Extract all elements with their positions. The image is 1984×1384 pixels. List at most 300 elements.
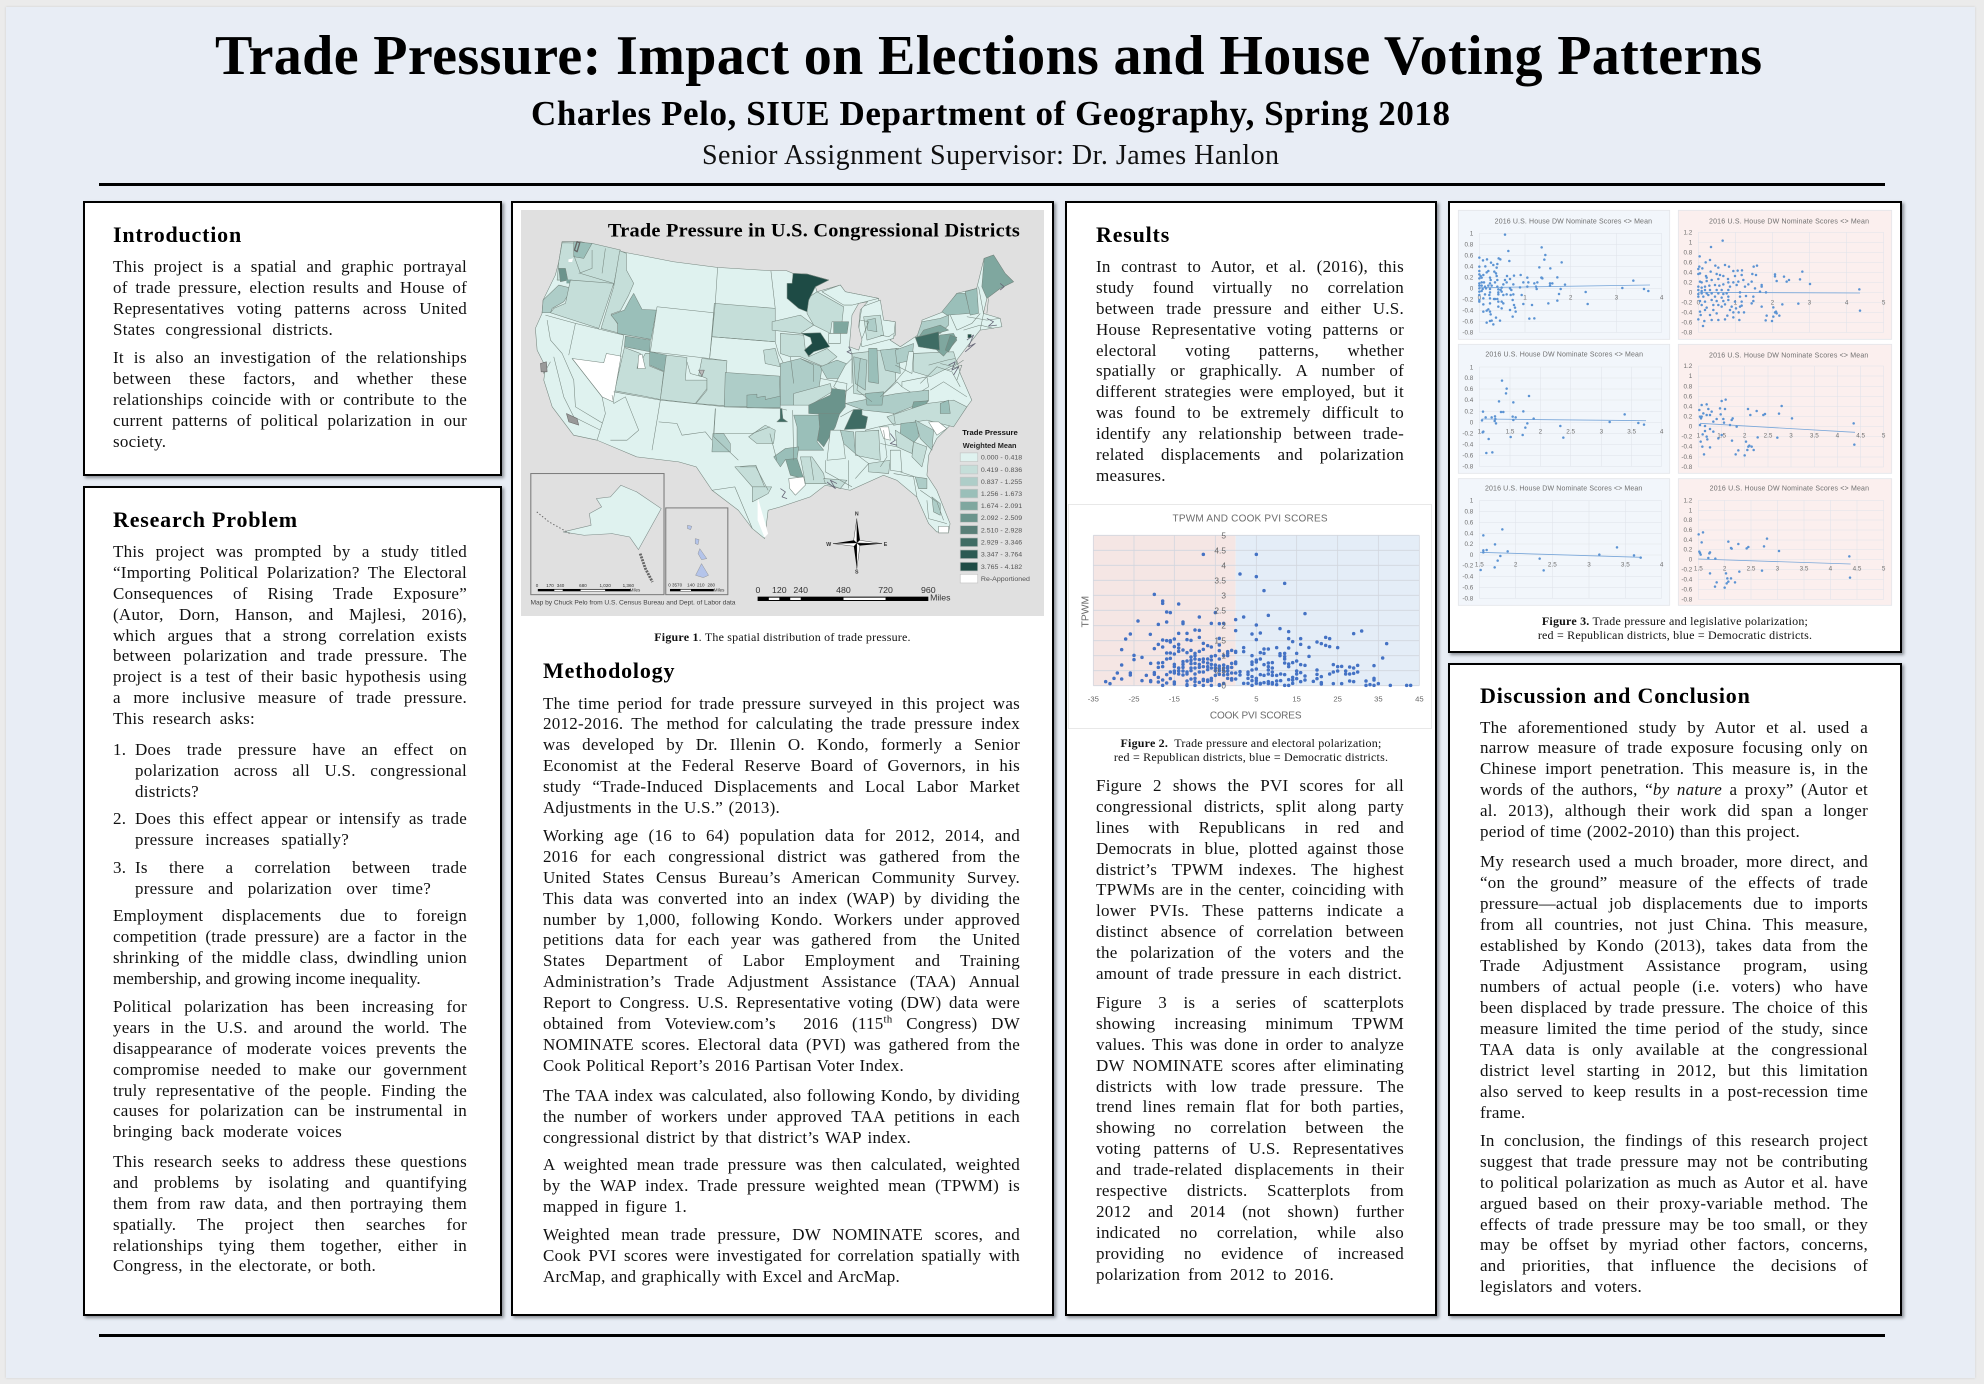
scale bar: 960 bbox=[921, 585, 935, 595]
text: methodology paragraph 1: Adjustments in the U.S.” (2013). bbox=[543, 798, 780, 817]
map legend: 0.419 - 0.836 bbox=[980, 467, 1022, 474]
text: results paragraph 3: showing increasing minimum TPWM bbox=[1096, 1014, 1404, 1033]
figure 3: six scatterplot grid: 4 bbox=[1845, 299, 1849, 306]
text: methodology paragraph 2 bbox=[543, 826, 1020, 1075]
figure 3: six scatterplot grid: 4.5 bbox=[1856, 433, 1866, 440]
text: results paragraph 2: the polarization of the voters and the bbox=[1096, 943, 1404, 962]
chart titles: 2016 U.S. House DW Nominate Scores <> Mean bbox=[1709, 219, 1869, 226]
figure 2: scatterplot of TPWM vs Cook PVI: 25 bbox=[1333, 694, 1342, 703]
tick labels: -0.4 bbox=[1462, 307, 1474, 314]
text: results paragraph 3: 2012 and 2014 (not shown) further bbox=[1096, 1202, 1404, 1221]
text: methodology paragraph 4: A weighted mean trade pressure was then calculated, weighted bbox=[543, 1155, 1020, 1174]
text: discussion paragraph 2: been displaced by trade pressure. The choice of this bbox=[1480, 998, 1868, 1017]
figure 3: six scatterplot grid: 5 bbox=[1882, 433, 1886, 440]
text: introduction paragraph 2: society. bbox=[113, 432, 166, 451]
text: research approach bbox=[113, 1152, 467, 1275]
figure 3: six scatterplot grid: 2 bbox=[1723, 566, 1727, 573]
tick labels: -0.6 bbox=[1681, 319, 1693, 326]
map legend: 3.347 - 3.764 bbox=[980, 552, 1022, 559]
text: research question 1: Does trade pressure have an effect on bbox=[135, 740, 467, 759]
text: methodology paragraph 1: Economist at the Federal Reserve Board of Governors, in his bbox=[543, 756, 1020, 775]
axis labels: 1 bbox=[1221, 651, 1226, 661]
figure 2: scatterplot of TPWM vs Cook PVI: COOK PVI SCORES bbox=[1210, 711, 1302, 722]
figure 3: six scatterplot grid: 3.5 bbox=[1627, 429, 1637, 436]
text: methodology paragraph 3: congressional district by that district’s WAP index. bbox=[543, 1128, 911, 1147]
map credit: Map by Chuck Pelo from U.S. Census Bureau and Dept. of Labor data bbox=[530, 599, 735, 606]
tick labels: 0 bbox=[1470, 552, 1474, 559]
text: political polarization: compromise needed to make our government bbox=[113, 1060, 467, 1079]
scale bar: 720 bbox=[878, 585, 893, 595]
inset: Hawaii: 0 3570 bbox=[668, 582, 682, 587]
text: results paragraph 2: Figure 2 shows the PVI scores for all bbox=[1096, 776, 1404, 795]
figure 3: six scatterplot grid: 3 bbox=[1615, 295, 1619, 302]
text: employment displacements: Employment displacements due to foreign bbox=[113, 906, 467, 925]
figure 3: six scatterplot grid: 2.5 bbox=[1764, 433, 1773, 440]
tick labels: 1 bbox=[1689, 507, 1693, 514]
tick labels: 0.6 bbox=[1465, 386, 1474, 393]
text: results paragraph 2 bbox=[1096, 776, 1404, 983]
panel: map and methodology bbox=[511, 201, 1054, 1316]
figure 3: six scatterplot grid: 1.5 bbox=[1506, 429, 1515, 436]
text: discussion paragraph 1: words of the authors, “by nature a proxy” (Autor et bbox=[1480, 780, 1868, 799]
figure 3: six scatterplot grid: 4 bbox=[1660, 295, 1664, 302]
text: methodology paragraph 2: Working age (16 to 64) population data for 2012, 2014, and bbox=[543, 826, 1020, 845]
text: conclusion paragraph: may be offset by myriad other factors, concerns, bbox=[1480, 1235, 1868, 1254]
inset: Hawaii: Miles bbox=[713, 588, 725, 593]
tick labels: 0.2 bbox=[1465, 541, 1474, 548]
tick labels: -0.6 bbox=[1462, 585, 1474, 592]
figure 2: scatterplot of TPWM vs Cook PVI: TPWM bbox=[1080, 596, 1091, 627]
text: results paragraph 1: House Representative voting patterns or bbox=[1096, 320, 1404, 339]
figure 3: six scatterplot grid: 5 bbox=[1882, 299, 1886, 306]
text: research problem paragraph 1: (Autor, Dorn, Hanson, and Majlesi, 2016), bbox=[113, 605, 467, 624]
text: research question 3: pressure and polarization over time? bbox=[135, 879, 431, 898]
axis labels: 2 bbox=[1221, 621, 1226, 631]
tick labels: 0.4 bbox=[1684, 269, 1693, 276]
text: research problem paragraph 1: This project was prompted by a study titled bbox=[113, 542, 467, 561]
text: introduction paragraph 2: between these factors, and whether these bbox=[113, 369, 467, 388]
figure 3: six scatterplot grid: 2 bbox=[1569, 295, 1573, 302]
heading: discussion and conclusion: Discussion and Conclusion bbox=[1480, 683, 1751, 708]
map legend: 0.837 - 1.255 bbox=[980, 479, 1022, 486]
text: results paragraph 1: different strategies were employed, but it bbox=[1096, 382, 1404, 401]
inset: Alaska: 1,020 bbox=[599, 583, 611, 588]
text: discussion paragraph 2: established by Kondo (2013), takes data from the bbox=[1480, 936, 1868, 955]
text: methodology paragraph 3: the number of workers under approved TAA petitions in each bbox=[543, 1107, 1020, 1126]
map legend bbox=[960, 428, 1030, 583]
text: research question 3 bbox=[113, 858, 467, 898]
figure 3: six scatterplot grid bbox=[1458, 210, 1892, 606]
figure 3: six scatterplot grid: 3 bbox=[1789, 433, 1793, 440]
tick labels: 0.6 bbox=[1684, 393, 1693, 400]
text: discussion paragraph 2: TAA data is only available at the congressional bbox=[1480, 1040, 1868, 1059]
map legend: Weighted Mean bbox=[962, 442, 1016, 450]
text: methodology paragraph 4 bbox=[543, 1155, 1020, 1216]
text: methodology paragraph 2: 2016 for each congressional district was gathered from the bbox=[543, 847, 1020, 866]
inset: Alaska: 170 bbox=[546, 583, 554, 588]
text: research problem paragraph 1: a more inclusive measure of trade pressure. bbox=[113, 688, 467, 707]
text: conclusion paragraph: and priorities, that influence the decisions of bbox=[1480, 1256, 1868, 1275]
figure 3: six scatterplot grid: 1 bbox=[1478, 429, 1482, 436]
figure 3: six scatterplot grid: 1.5 bbox=[1694, 566, 1703, 573]
figure 3: six scatterplot grid: 0 bbox=[1478, 295, 1482, 302]
figure 3: six scatterplot grid: 2.5 bbox=[1747, 566, 1756, 573]
text: research approach: relationships tying them together, either in bbox=[113, 1236, 467, 1255]
heading: research problem: Research Problem bbox=[113, 507, 298, 532]
text: results paragraph 3: Figure 3 is a series of scatterplots bbox=[1096, 993, 1404, 1012]
figure 2: scatterplot of TPWM vs Cook PVI: 35 bbox=[1374, 694, 1383, 703]
tick labels: 0.8 bbox=[1465, 509, 1474, 516]
tick labels: -0.2 bbox=[1681, 567, 1693, 574]
data points bbox=[1479, 235, 1648, 324]
caption: figure 2 bbox=[1114, 736, 1388, 764]
figure 2: scatterplot of TPWM vs Cook PVI: -25 bbox=[1128, 694, 1140, 703]
inset: Hawaii: 280 bbox=[707, 582, 715, 587]
figure 2: scatterplot of TPWM vs Cook PVI bbox=[1068, 504, 1432, 729]
text: employment displacements: membership, and growing income inequality. bbox=[113, 969, 421, 988]
scale bar bbox=[755, 585, 950, 602]
text: introduction paragraph 1: This project is a spatial and graphic portrayal bbox=[113, 257, 467, 276]
text: methodology paragraph 2: Report to Congress. U.S. Representative voting (DW) data were bbox=[543, 993, 1020, 1012]
tick labels: 0.6 bbox=[1465, 519, 1474, 526]
text: methodology paragraph 4: by the WAP index. Trade pressure weighted mean (TPWM) is bbox=[543, 1176, 1020, 1195]
text: results paragraph 3: voting patterns of U.S. Representatives bbox=[1096, 1139, 1404, 1158]
text: employment displacements: shrinking of the middle class, dwindling union bbox=[113, 948, 467, 967]
figure 3: six scatterplot grid: 3 bbox=[1587, 561, 1591, 568]
southern districts bbox=[773, 430, 948, 533]
tick labels: 0.2 bbox=[1684, 279, 1693, 286]
text: introduction paragraph 2: relationships coincide with or contribute to the bbox=[113, 390, 467, 409]
tick labels: -0.8 bbox=[1462, 463, 1474, 470]
figure 3: six scatterplot grid: 3.5 bbox=[1800, 566, 1809, 573]
panel: introduction bbox=[83, 201, 502, 476]
tick labels: -0.2 bbox=[1462, 296, 1474, 303]
figure 3: six scatterplot grid: 2 bbox=[1539, 429, 1543, 436]
figure 3: six scatterplot grid: 1 bbox=[1734, 299, 1738, 306]
tick labels: 0.4 bbox=[1465, 530, 1474, 537]
axis labels: 3 bbox=[1221, 591, 1226, 601]
text: methodology paragraph 1: The time period for trade pressure surveyed in this project was bbox=[543, 694, 1020, 712]
map legend: 1.674 - 2.091 bbox=[980, 503, 1022, 510]
text: introduction paragraph 1: Representatives voting patterns across United bbox=[113, 299, 467, 318]
scale bar: 480 bbox=[836, 585, 851, 595]
map title: Trade Pressure in U.S. Congressional Districts bbox=[607, 220, 1020, 242]
figure 1: trade pressure map bbox=[521, 210, 1044, 616]
figure 3: six scatterplot grid: 3 bbox=[1600, 429, 1604, 436]
caption: figure 2: Figure 2. Trade pressure and electoral polarization; bbox=[1120, 736, 1381, 750]
tick labels: 0 bbox=[1689, 424, 1693, 431]
figure 2: scatterplot of TPWM vs Cook PVI: -15 bbox=[1169, 694, 1180, 703]
text: results paragraph 3: districts with low trade pressure. The bbox=[1096, 1077, 1404, 1096]
tick labels: -0.2 bbox=[1681, 434, 1693, 441]
map legend: Re-Apportioned bbox=[980, 576, 1030, 583]
map legend: 1.256 - 1.673 bbox=[980, 491, 1022, 498]
western districts bbox=[540, 242, 788, 452]
text: results paragraph 3 bbox=[1096, 993, 1404, 1284]
text: discussion paragraph 2: My research used a much broader, more direct, and bbox=[1480, 852, 1868, 871]
text: introduction paragraph 1 bbox=[113, 257, 467, 339]
text: results paragraph 3: trend lines remain flat for both parties, bbox=[1096, 1097, 1404, 1116]
chart titles: 2016 U.S. House DW Nominate Scores <> Mean bbox=[1495, 219, 1652, 226]
title: Trade Pressure: Impact on Elections and House Voting Patterns bbox=[215, 25, 1762, 87]
inset: Hawaii bbox=[665, 508, 727, 595]
text: political polarization bbox=[113, 997, 467, 1141]
map legend: 2.929 - 3.346 bbox=[980, 540, 1022, 547]
panel: results bbox=[1065, 201, 1437, 1316]
figure 3: six scatterplot grid: 3.5 bbox=[1621, 561, 1630, 568]
text: methodology paragraph 3: The TAA index was calculated, also following Kondo, by dividing bbox=[543, 1086, 1020, 1105]
tick labels: 0 bbox=[1689, 289, 1693, 296]
tick labels: 0.2 bbox=[1465, 274, 1474, 281]
map legend: Trade Pressure bbox=[962, 428, 1017, 437]
axis labels: 4 bbox=[1221, 561, 1226, 571]
text: results paragraph 3: polarization from 2012 to 2016. bbox=[1096, 1265, 1334, 1284]
tick labels: -0.4 bbox=[1681, 309, 1693, 316]
panel: discussion and conclusion bbox=[1448, 663, 1902, 1316]
chart titles: 2016 U.S. House DW Nominate Scores <> Mean bbox=[1485, 486, 1642, 493]
text: results paragraph 3: and trade-related displacements in their bbox=[1096, 1160, 1404, 1179]
tick labels: -0.8 bbox=[1681, 464, 1693, 471]
text: methodology paragraph 2: number by 1,000, following Kondo. Workers under approved bbox=[543, 910, 1020, 929]
tick labels: -0.4 bbox=[1462, 441, 1474, 448]
eastern districts bbox=[772, 255, 1013, 450]
tick labels: 0 bbox=[1470, 285, 1474, 292]
text: methodology paragraph 2: NOMINATE scores. Electoral data (PVI) was gathered from the bbox=[543, 1035, 1020, 1054]
text: methodology paragraph 5: Weighted mean trade pressure, DW NOMINATE scores, and bbox=[543, 1225, 1020, 1244]
scale bar: 240 bbox=[793, 585, 808, 595]
text: discussion paragraph 2: from all countries, not just China. This measure, bbox=[1480, 915, 1868, 934]
scale bar: 120 bbox=[772, 585, 786, 595]
text: methodology paragraph 5: Cook PVI scores were investigated for correlation spatially with bbox=[543, 1246, 1020, 1265]
tick labels: 0.8 bbox=[1465, 375, 1474, 382]
text: results paragraph 1: In contrast to Autor, et al. (2016), this bbox=[1096, 257, 1404, 276]
text: introduction paragraph 2: current patterns of political polarization in our bbox=[113, 411, 467, 430]
text: results paragraph 2: lines with Republicans in red and bbox=[1096, 818, 1404, 837]
text: conclusion paragraph: In conclusion, the findings of this research project bbox=[1480, 1131, 1868, 1150]
text: research question 2: Does this effect appear or intensify as trade bbox=[135, 809, 467, 828]
map legend: 3.765 - 4.182 bbox=[980, 564, 1022, 571]
tick labels: 0.4 bbox=[1684, 403, 1693, 410]
text: results paragraph 2: Democrats in blue, plotted against those bbox=[1096, 839, 1404, 858]
text: introduction paragraph 1: States congressional districts. bbox=[113, 320, 333, 339]
text: discussion paragraph 1 bbox=[1480, 718, 1868, 841]
text: results paragraph 3: indicated no correlation, while also bbox=[1096, 1223, 1404, 1242]
text: methodology paragraph 2: United States Census Bureau’s American Community Survey. bbox=[543, 868, 1020, 887]
text: results paragraph 2: lower PVIs. These patterns indicate a bbox=[1096, 901, 1404, 920]
text: results paragraph 1 bbox=[1096, 257, 1404, 485]
text: results paragraph 1: was found to be extremely difficult to bbox=[1096, 403, 1404, 422]
caption: figure 3: Figure 3. Trade pressure and legislative polarization; bbox=[1542, 614, 1808, 628]
text: political polarization: years in the U.S. and around the world. The bbox=[113, 1018, 467, 1037]
tick labels: -0.2 bbox=[1462, 563, 1474, 570]
text: methodology paragraph 2: Cook Political Report’s 2016 Partisan Voter Index. bbox=[543, 1056, 904, 1075]
text: conclusion paragraph: suggest that trade pressure may not be contributing bbox=[1480, 1152, 1868, 1171]
tick labels: -0.6 bbox=[1681, 454, 1693, 461]
tick labels: 0.4 bbox=[1684, 537, 1693, 544]
icon: compass rose bbox=[826, 512, 887, 576]
inset: Hawaii: 140 bbox=[687, 582, 695, 587]
panel: figure 3 scatterplots bbox=[1448, 201, 1902, 653]
tick labels: -0.8 bbox=[1681, 329, 1693, 336]
tick labels: 0.2 bbox=[1684, 547, 1693, 554]
text: results paragraph 2: district’s TPWM indexes. The highest bbox=[1096, 860, 1404, 879]
tick labels: -0.6 bbox=[1462, 318, 1474, 325]
figure 3: six scatterplot grid: 4 bbox=[1660, 561, 1664, 568]
text: methodology paragraph 2: obtained from Voteview.com’s 2016 (115th Congress) DW bbox=[543, 1013, 1020, 1033]
text: introduction paragraph 1: of trade pressure, election results and House of bbox=[113, 278, 467, 297]
text: research approach: This research seeks to address these questions bbox=[113, 1152, 467, 1171]
text: results paragraph 2: amount of trade pressure in each district. bbox=[1096, 964, 1402, 983]
text: discussion paragraph 2: pressure—actual job displacements due to imports bbox=[1480, 894, 1868, 913]
text: political polarization: causes for polarization can be instrumental in bbox=[113, 1101, 467, 1120]
text: results paragraph 1: identify any relationship between trade- bbox=[1096, 424, 1404, 443]
icon: compass rose: S bbox=[855, 570, 859, 576]
tick labels: 0.4 bbox=[1465, 397, 1474, 404]
map legend: 2.510 - 2.928 bbox=[980, 527, 1022, 534]
supervisor line: Senior Assignment Supervisor: Dr. James Hanlon bbox=[702, 140, 1279, 171]
text: research question 1 bbox=[113, 740, 467, 801]
text: results paragraph 3: showing no correlation between the bbox=[1096, 1118, 1404, 1137]
tick labels: 1 bbox=[1470, 231, 1474, 238]
text: methodology paragraph 2: This data was converted into an index (WAP) by dividing the bbox=[543, 889, 1020, 908]
text: research problem paragraph 1 bbox=[113, 542, 467, 728]
figure 3: six scatterplot grid: 1 bbox=[1523, 295, 1527, 302]
data points bbox=[1106, 554, 1411, 685]
tick labels: 1 bbox=[1470, 498, 1474, 505]
text: research approach: spatially. The project then searches for bbox=[113, 1215, 467, 1234]
figure 3: six scatterplot grid: 2.5 bbox=[1548, 561, 1557, 568]
trend lines bbox=[1479, 285, 1860, 564]
text: methodology paragraph 1 bbox=[543, 694, 1020, 817]
figure 2: scatterplot of TPWM vs Cook PVI: 5 bbox=[1254, 694, 1258, 703]
text: conclusion paragraph: effects of trade pressure may be too small, or they bbox=[1480, 1215, 1868, 1234]
text: discussion paragraph 1: narrow measure of trade exposure focusing only on bbox=[1480, 738, 1868, 757]
axis labels bbox=[1214, 530, 1226, 691]
text: research problem paragraph 1: between polarization and trade pressure. The bbox=[113, 646, 467, 665]
text: methodology paragraph 4: mapped in figure 1. bbox=[543, 1197, 687, 1216]
text: research question 1: polarization across all U.S. congressional bbox=[135, 761, 467, 780]
text: methodology paragraph 2: petitions data for each year was gathered from the United bbox=[543, 930, 1020, 949]
text: research question 2 bbox=[113, 809, 467, 849]
text: research problem paragraph 1: This research asks: bbox=[113, 709, 255, 728]
scale bar: Miles bbox=[930, 593, 950, 602]
text: research approach: Congress, in the electorate, or both. bbox=[113, 1256, 376, 1275]
text: political polarization: bringing back moderate voices bbox=[113, 1122, 342, 1141]
figure 2: scatterplot of TPWM vs Cook PVI: -35 bbox=[1088, 694, 1099, 703]
tick labels: 0.8 bbox=[1684, 517, 1693, 524]
text: methodology paragraph 1: 2012-2016. The method for calculating the trade pressure index bbox=[543, 714, 1020, 733]
text: discussion paragraph 2: numbers of actual people (i.e. voters) who have bbox=[1480, 977, 1868, 996]
tick labels: -0.2 bbox=[1681, 299, 1693, 306]
text: discussion paragraph 2 bbox=[1480, 852, 1868, 1122]
icon: compass rose: E bbox=[883, 542, 887, 548]
axis labels: 5 bbox=[1221, 530, 1226, 540]
text: conclusion paragraph bbox=[1480, 1131, 1868, 1296]
text: research problem paragraph 1: “Importing Political Polarization? The Electoral bbox=[113, 563, 467, 582]
text: conclusion paragraph: to political polarization as much as Autor et al. have bbox=[1480, 1173, 1868, 1192]
scale bar: 0 bbox=[755, 585, 760, 595]
text: results paragraph 3: DW NOMINATE scores after eliminating bbox=[1096, 1056, 1404, 1075]
figure 2: scatterplot of TPWM vs Cook PVI: -5 bbox=[1212, 694, 1219, 703]
tick labels: -0.4 bbox=[1462, 574, 1474, 581]
figure 3: six scatterplot grid: 1.5 bbox=[1717, 433, 1727, 440]
tick labels: -0.8 bbox=[1681, 596, 1693, 603]
contiguous US choropleth bbox=[535, 242, 1013, 539]
heading: results: Results bbox=[1096, 222, 1170, 247]
tick labels: 0.8 bbox=[1465, 241, 1474, 248]
figure 3: six scatterplot grid: 4 bbox=[1836, 433, 1840, 440]
figure 3: six scatterplot grid: 2 bbox=[1514, 561, 1518, 568]
text: research question 1: districts? bbox=[135, 782, 199, 801]
text: research problem paragraph 1: project is a test of their basic hypothesis using bbox=[113, 667, 467, 686]
text: discussion paragraph 2: Trade Adjustment Assistance program, using bbox=[1480, 956, 1868, 975]
text: discussion paragraph 2: district level starting in 2012, but this limitation bbox=[1480, 1061, 1868, 1080]
text: discussion paragraph 2: frame. bbox=[1480, 1103, 1525, 1122]
text: methodology paragraph 2: Administration’s Trade Adjustment Assistance (TAA) Annual bbox=[543, 972, 1020, 991]
text: discussion paragraph 1: al. 2013), although their work did span a longer bbox=[1480, 801, 1868, 820]
text: discussion paragraph 2: “on the ground” measure of the effects of trade bbox=[1480, 873, 1868, 892]
tick labels: -0.2 bbox=[1462, 430, 1474, 437]
map legend: 0.000 - 0.418 bbox=[980, 455, 1022, 461]
heading: introduction: Introduction bbox=[113, 222, 242, 247]
tick labels: 0 bbox=[1689, 557, 1693, 564]
text: methodology paragraph 5 bbox=[543, 1225, 1020, 1286]
tick labels: 1 bbox=[1689, 373, 1693, 380]
figure 3: six scatterplot grid: 4.5 bbox=[1853, 566, 1862, 573]
tick labels: 0.8 bbox=[1684, 249, 1693, 256]
text: conclusion paragraph: legislators and voters. bbox=[1480, 1277, 1642, 1296]
tick labels: 0.6 bbox=[1465, 252, 1474, 259]
axis labels: 2.5 bbox=[1214, 606, 1226, 616]
icon: compass rose: N bbox=[854, 512, 859, 518]
text: research problem paragraph 1: which argues that a strong correlation exists bbox=[113, 626, 467, 645]
panel: research problem bbox=[83, 486, 502, 1316]
chart titles: 2016 U.S. House DW Nominate Scores <> Mean bbox=[1710, 486, 1869, 493]
tick labels: 1.2 bbox=[1684, 497, 1693, 504]
tick labels: -0.6 bbox=[1462, 452, 1474, 459]
tick labels: -0.6 bbox=[1681, 586, 1693, 593]
text: results paragraph 2: TPWMs are in the center, coinciding with bbox=[1096, 880, 1404, 899]
icon: compass rose: W bbox=[826, 542, 831, 548]
text: results paragraph 1: related displacements and polarization bbox=[1096, 445, 1404, 464]
caption: figure 3: red = Republican districts, blue = Democratic districts. bbox=[1538, 628, 1812, 642]
inset: Alaska: 340 bbox=[556, 583, 564, 588]
figure 2: scatterplot of TPWM vs Cook PVI: 45 bbox=[1415, 694, 1424, 703]
figure 3: six scatterplot grid: 0 bbox=[1697, 299, 1701, 306]
chart titles bbox=[1485, 219, 1869, 493]
text: results paragraph 3: respective districts. Scatterplots from bbox=[1096, 1181, 1404, 1200]
text: results paragraph 1: measures. bbox=[1096, 466, 1166, 485]
caption: figure 1: Figure 1. The spatial distribution of trade pressure. bbox=[654, 630, 911, 644]
tick labels: -0.8 bbox=[1462, 329, 1474, 336]
text: results paragraph 1: electoral voting patterns, whether bbox=[1096, 341, 1404, 360]
text: results paragraph 2: congressional districts, split along party bbox=[1096, 797, 1404, 816]
axis labels: 4.5 bbox=[1214, 546, 1226, 556]
text: research question 3: Is there a correlation between trade bbox=[135, 858, 467, 877]
tick labels: -0.8 bbox=[1462, 595, 1474, 602]
text: research question 2: 2. bbox=[113, 809, 126, 828]
chart titles: 2016 U.S. House DW Nominate Scores <> Mean bbox=[1485, 352, 1643, 359]
text: discussion paragraph 1: Chinese import penetration. This measure is, in the bbox=[1480, 759, 1868, 778]
header bbox=[215, 25, 1762, 171]
tick labels bbox=[1462, 229, 1693, 603]
inset: Alaska: Miles bbox=[629, 588, 641, 593]
text: political polarization: disappearance of moderate voices prevents the bbox=[113, 1039, 467, 1058]
inset: Hawaii: 210 bbox=[696, 582, 705, 587]
figure 3: six scatterplot grid: 3 bbox=[1776, 566, 1780, 573]
text: conclusion paragraph: argued based on their proxy-variable method. The bbox=[1480, 1194, 1868, 1213]
text: results paragraph 1: spatially or graphically. A number of bbox=[1096, 361, 1404, 380]
